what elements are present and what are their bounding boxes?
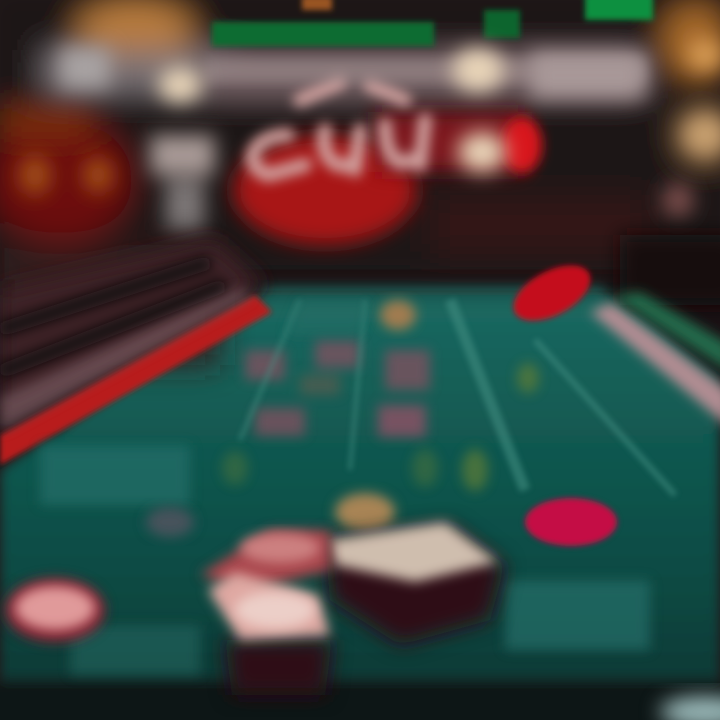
red chip on felt bbox=[525, 498, 617, 546]
background lights and signage bbox=[0, 0, 720, 365]
green neon signs bbox=[212, 0, 653, 46]
table felt bbox=[0, 285, 720, 720]
large red casino sign bbox=[205, 58, 645, 245]
amber lamps on left machine bbox=[19, 155, 113, 195]
table betting layout bbox=[40, 300, 675, 675]
bottom right highlight bbox=[660, 696, 720, 720]
pink chip on left bbox=[5, 578, 105, 642]
left rail with chips bbox=[0, 240, 272, 465]
right rail and red marker bbox=[505, 235, 720, 428]
card and chip stacks foreground bbox=[200, 493, 505, 695]
bright bulbs bbox=[60, 39, 720, 230]
